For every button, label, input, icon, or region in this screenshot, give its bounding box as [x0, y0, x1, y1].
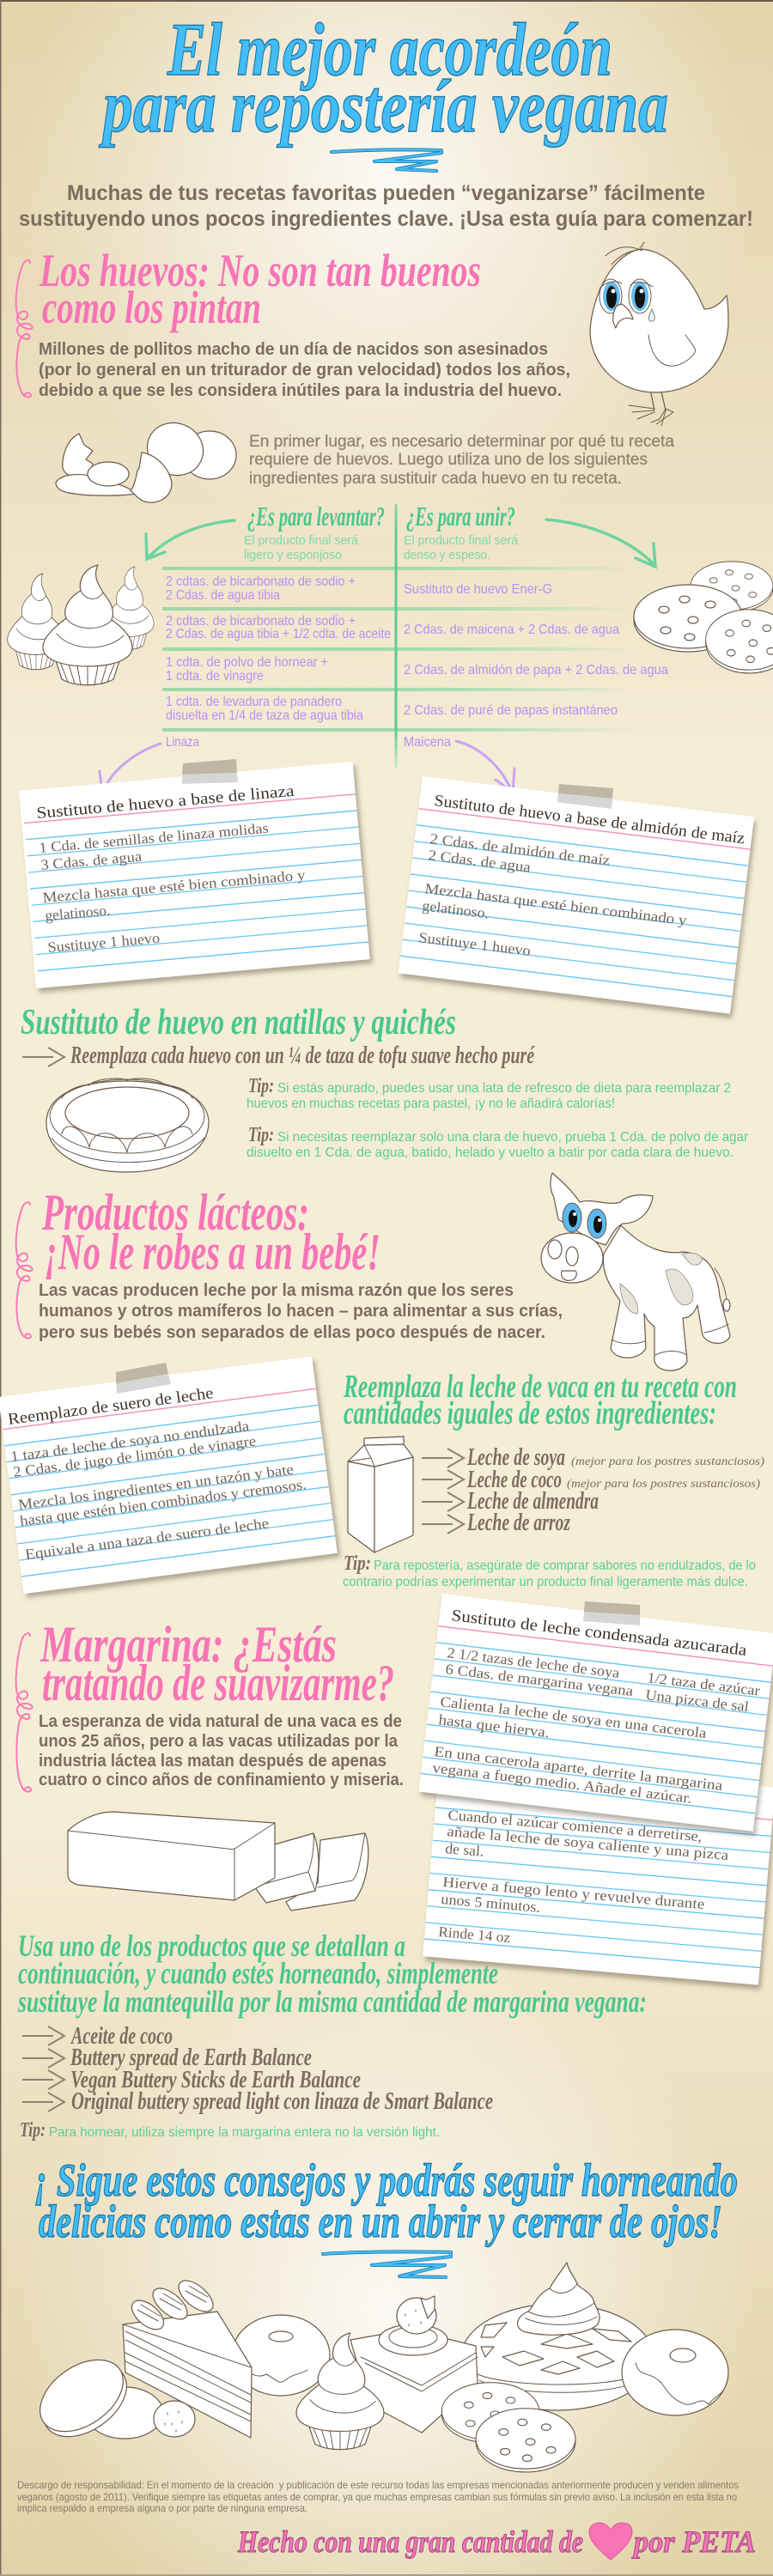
footer credit: Hecho con una gran cantidad de: [237, 2524, 583, 2559]
icon: cupcakes: [8, 565, 154, 685]
text: margarine intro: cuatro o cinco años de confinamiento y miseria.: [39, 1771, 404, 1789]
card: condensed milk, front sheet: 6 Cdas. de margarina vegana: [445, 1661, 635, 1699]
left column items: 2 cdtas. de bicarbonato de sodio +: [166, 574, 356, 589]
tip: egg white: [247, 1124, 749, 1160]
text: dairy intro: Las vacas producen leche por la misma razón que los seres: [39, 1281, 514, 1300]
text: margarine intro: unos 25 años, pero a las vacas utilizadas por la: [39, 1732, 399, 1751]
card: condensed milk, front sheet: Una pizca de sal: [645, 1686, 750, 1715]
card: condensed milk, back sheet: Hierve a fuego lento y revuelve durante: [442, 1874, 705, 1912]
card: buttermilk: [0, 1357, 338, 1594]
list: milk alternatives: Leche de soya: [466, 1444, 565, 1471]
left column items: 1 cdta. de levadura de panadero: [166, 695, 342, 709]
icon: cow: [541, 1173, 730, 1370]
text: margarine intro: La esperanza de vida natural de una vaca es de: [39, 1712, 402, 1731]
column heading: binding: ¿Es para unir?: [406, 501, 515, 532]
icon: desserts: [27, 2263, 728, 2472]
card: buttermilk: 1 taza de leche de soya no endulzada: [9, 1418, 251, 1465]
tape: [116, 1363, 171, 1394]
card: flax egg: gelatinoso.: [45, 902, 111, 924]
heading: eggs: [39, 245, 481, 333]
tip: full margarine: Para hornear, utiliza siempre la margarina entera no la versión light.: [49, 2125, 440, 2140]
card: flax egg: 3 Cdas. de agua: [40, 848, 143, 873]
column heading: leavening: [244, 501, 385, 562]
card: buttermilk: Equivale a una taza de suero de leche: [24, 1515, 270, 1563]
text: margarine intro: industria láctea las matan después de apenas: [39, 1752, 386, 1771]
disclaimer: implica respaldo a empresa alguna o por parte de ninguna empresa.: [17, 2502, 307, 2514]
card: buttermilk: hasta que estén bien combinados y cremosos.: [19, 1476, 307, 1529]
arrows: milk list: [422, 1449, 464, 1534]
list: margarine products: Aceite de coco: [70, 2023, 173, 2050]
column heading: leavening: El producto final será: [244, 533, 359, 548]
icon: milk carton: [348, 1437, 413, 1552]
cookies: [441, 2383, 575, 2472]
macarons and strawberry: [27, 2345, 195, 2451]
heading: milk replacement: [343, 1369, 737, 1431]
title: [98, 9, 668, 149]
heading: dairy: [41, 1184, 380, 1280]
text: eggs intro: (por lo general en un triturador de gran velocidad) todos los años,: [39, 361, 570, 380]
tip: soda: [247, 1075, 731, 1111]
left column items: [166, 574, 391, 750]
tip: full margarine: [20, 2119, 440, 2142]
heading: margarine: tratando de suavizarme?: [42, 1655, 394, 1711]
card: condensed milk, back sheet: [423, 1759, 773, 1985]
icon: cookies: [634, 562, 773, 673]
tape: [182, 759, 238, 784]
card: corn starch egg: 2 Cdas. de agua: [428, 847, 532, 876]
card: flax egg: 1 Cda. de semillas de linaza molidas: [39, 820, 269, 856]
table rules: [162, 504, 652, 769]
cupcake: [296, 2333, 384, 2450]
bracket: eggs: [16, 260, 33, 397]
arrow: green left: [146, 520, 234, 559]
list: margarine products: Original buttery spread light con linaza de Smart Balance: [71, 2088, 493, 2115]
text: eggs intro: Millones de pollitos macho de un día de nacidos son asesinados: [39, 340, 548, 359]
column heading: binding: El producto final será: [404, 533, 519, 548]
card: corn starch egg: 2 Cdas. de almidón de maíz: [429, 830, 612, 869]
list: margarine products: [70, 2023, 493, 2115]
tip: unsweetened: [343, 1552, 756, 1589]
card: flax egg: Sustituye 1 huevo: [47, 930, 161, 956]
bracket: margarine: [16, 1633, 33, 1791]
left column items: Linaza: [166, 735, 199, 750]
heading: margarine: [40, 1616, 394, 1711]
tape: [557, 784, 613, 809]
text: eggs intro: debido a que se les considera inútiles para la industria del huevo.: [39, 381, 562, 400]
list: milk alternatives: Leche de coco: [466, 1467, 562, 1493]
tip: egg white: Si necesitas reemplazar solo una clara de huevo, prueba 1 Cda. de polvo de agar: [277, 1130, 749, 1145]
card: condensed milk, back sheet: Cuando el azúcar comience a derretirse,: [447, 1807, 703, 1844]
disclaimer: Descargo de responsabilidad: En el momento de la creación y publicación de este recurso todas las empresas mencionadas anteriormente producen y venden alimentos: [17, 2479, 739, 2491]
heading: dairy: Productos lácteos:: [41, 1184, 309, 1241]
donut right: [622, 2330, 728, 2415]
list: milk alternatives: Leche de arroz: [466, 1510, 570, 1536]
column heading: binding: denso y espeso.: [404, 548, 490, 562]
right column items: 2 Cdas. de almidón de papa + 2 Cdas. de agua: [404, 663, 668, 677]
closing heading: [34, 2154, 738, 2247]
card: condensed milk, back sheet: unos 5 minutos.: [441, 1891, 541, 1916]
intro text: Muchas de tus recetas favoritas pueden “veganizarse” fácilmente: [67, 181, 705, 205]
card: flax egg: [19, 759, 370, 988]
text: tofu: Reemplaza cada huevo con un ¼ de taza de tofu suave hecho puré: [70, 1042, 535, 1069]
bracket: dairy: [16, 1202, 33, 1338]
card: buttermilk: 2 Cdas. de jugo de limón o de vinagre: [12, 1432, 257, 1480]
list: milk alternatives: Leche de almendra: [466, 1488, 599, 1515]
text: determine why eggs: [249, 433, 674, 488]
heading: margarine products: continuación, y cuando estés horneando, simplemente: [18, 1956, 498, 1990]
list: margarine products: Buttery spread de Earth Balance: [70, 2044, 312, 2071]
card: flax egg: Sustituto de huevo a base de linaza: [36, 782, 295, 823]
right column items: 2 Cdas. de puré de papas instantáneo: [404, 703, 618, 718]
arrows: margarine list: [22, 2026, 64, 2111]
text: determine why eggs: requiere de huevos. Luego utiliza uno de los siguientes: [249, 451, 648, 469]
card: condensed milk, front sheet: hasta que hierva.: [438, 1711, 551, 1741]
card: condensed milk, front sheet: Sustituto de leche condensada azucarada: [450, 1607, 748, 1660]
tip: full margarine: Tip:: [20, 2119, 46, 2142]
card: corn starch egg: [399, 776, 754, 1014]
list: milk alternatives: (mejor para los postres sustanciosos): [571, 1455, 764, 1468]
column heading: leavening: ligero y esponjoso: [244, 548, 342, 562]
heading: margarine: Margarina: ¿Estás: [40, 1616, 337, 1673]
card: corn starch egg: Sustituto de huevo a base de almidón de maíz: [433, 792, 746, 848]
tip: soda: huevos en muchas recetas para pastel, ¡y no le añadirá calorías!: [247, 1097, 615, 1111]
pie with lattice: [461, 2263, 654, 2410]
card: condensed milk, front sheet: 2 1/2 tazas de leche de soya: [447, 1644, 621, 1681]
intro text: sustituyendo unos pocos ingredientes clave. ¡Usa esta guía para comenzar!: [19, 207, 753, 231]
card: condensed milk, back sheet: Rinde 14 oz: [438, 1923, 511, 1946]
card: corn starch egg: Mezcla hasta que esté bien combinado y: [424, 880, 688, 928]
text: margarine intro: [39, 1712, 404, 1789]
card: condensed milk, front sheet: [419, 1594, 773, 1832]
title scribble: [332, 149, 441, 171]
icon: pie: [46, 1078, 209, 1172]
card: condensed milk, back sheet: de sal.: [445, 1840, 484, 1860]
text: dairy intro: pero sus bebés son separados de ellas poco después de nacer.: [39, 1323, 545, 1342]
arrow: green right: [546, 519, 655, 567]
left column items: 2 Cdas. de agua tibia + 1/2 cdta. de aceite: [166, 627, 391, 641]
heading: eggs: Los huevos: No son tan buenos: [39, 245, 481, 296]
layer cake slice: [123, 2275, 252, 2438]
heading: margarine products: Usa uno de los productos que se detallan a: [18, 1929, 405, 1963]
donut left: [232, 2315, 330, 2396]
text: determine why eggs: En primer lugar, es necesario determinar por qué tu receta: [249, 433, 674, 451]
icon: margarine block: [68, 1812, 368, 1911]
column heading: binding: [404, 501, 519, 562]
right column items: Sustituto de huevo Ener-G: [404, 582, 552, 597]
left column items: 2 Cdas. de agua tibia: [166, 588, 280, 603]
disclaimer: [17, 2479, 739, 2514]
intro text: [19, 181, 753, 231]
list: milk alternatives: (mejor para los postres sustanciosos): [567, 1478, 760, 1491]
card: condensed milk, front sheet: En una cacerola aparte, derrite la margarina: [434, 1743, 724, 1794]
card: condensed milk, front sheet: 1/2 taza de azúcar: [647, 1669, 761, 1699]
tip: unsweetened: contrario podrías experimentar un producto final ligeramente más dulce.: [343, 1575, 748, 1589]
text: determine why eggs: ingredientes para sustituir cada huevo en tu receta.: [249, 470, 622, 488]
card: condensed milk, back sheet: añade la leche de soya caliente y una pizca: [447, 1823, 730, 1863]
icon: heart: [589, 2523, 632, 2560]
tip: egg white: disuelto en 1 Cda. de agua, batido, helado y vuelto a batir por cada clara de huevo.: [247, 1145, 733, 1160]
card: buttermilk: Mezcla los ingredientes en un tazón y bate: [17, 1461, 295, 1513]
text: dairy intro: [39, 1281, 563, 1342]
tape: [583, 1601, 640, 1625]
text: eggs intro: [39, 340, 570, 400]
card: condensed milk, front sheet: Calienta la leche de soya en una cacerola: [440, 1693, 708, 1741]
icon: broken eggs: [56, 414, 236, 502]
right column items: Maicena: [404, 735, 451, 750]
left column items: disuelta en 1/4 de taza de agua tibia: [166, 708, 363, 723]
closing scribble: [323, 2251, 451, 2277]
list: margarine products: Vegan Buttery Sticks de Earth Balance: [70, 2067, 361, 2093]
footer credit: por PETA: [631, 2524, 756, 2559]
tip: egg white: Tip:: [248, 1124, 274, 1146]
arrow: [22, 1048, 64, 1066]
card: corn starch egg: gelatinoso.: [422, 897, 490, 921]
column heading: leavening: ¿Es para levantar?: [247, 501, 385, 532]
heading: custards: Sustituto de huevo en natillas y quichés: [21, 1003, 456, 1042]
title: El mejor acordeón: [167, 9, 612, 92]
left column items: 1 cdta. de vinagre: [166, 669, 264, 683]
icon: crying chick: [590, 242, 728, 426]
tip: soda: Tip:: [248, 1075, 274, 1097]
tip: soda: Si estás apurado, puedes usar una lata de refresco de dieta para reemplazar 2: [277, 1081, 731, 1096]
square cake with strawberry: [350, 2296, 478, 2433]
right column items: 2 Cdas. de maicena + 2 Cdas. de agua: [404, 623, 619, 637]
heading: eggs: como los pintan: [42, 282, 261, 333]
heading: margarine products: [17, 1929, 647, 2019]
list: milk alternatives: [466, 1444, 764, 1536]
card: flax egg: Mezcla hasta que esté bien combinado y: [42, 866, 307, 906]
text: dairy intro: humanos y otros mamíferos lo hacen – para alimentar a sus crías,: [39, 1302, 563, 1321]
card: corn starch egg: Sustituye 1 huevo: [418, 929, 532, 959]
arrow: purple right: [456, 741, 514, 793]
tip: unsweetened: Tip:: [344, 1552, 371, 1575]
left column items: 1 cdta. de polvo de hornear +: [166, 655, 328, 670]
card: condensed milk, front sheet: vegana a fuego medio. Añade el azúcar.: [432, 1759, 693, 1807]
heading: dairy: ¡No le robes a un bebé!: [45, 1224, 380, 1280]
arrow: purple left: [100, 744, 161, 794]
egg substitute table: [162, 501, 668, 769]
right column items: [404, 582, 668, 750]
left column items: 2 cdtas. de bicarbonato de sodio +: [166, 614, 356, 629]
card: buttermilk: Reemplazo de suero de leche: [7, 1384, 215, 1429]
